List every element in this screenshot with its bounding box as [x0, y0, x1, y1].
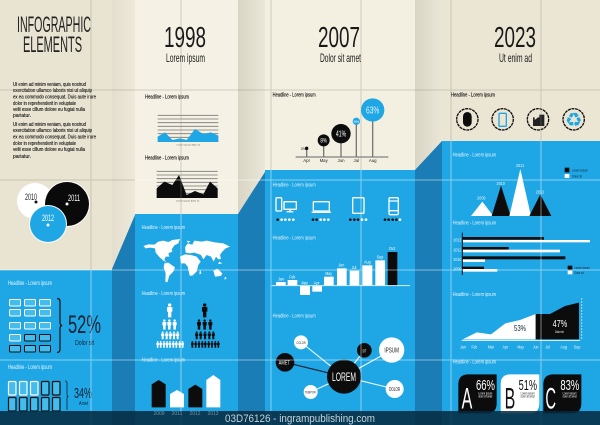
bar chart: horizontal: 2011 [453, 247, 462, 252]
chart: triangles [471, 163, 588, 216]
text block: intro paragraphs: pariatur. [13, 154, 31, 160]
card: A 66%: A [462, 382, 472, 415]
title: ELEMENTS [23, 32, 82, 57]
chart: split area: 47% [553, 319, 568, 330]
caption: Dolor sit [75, 340, 94, 347]
diagram: network bubbles: IPSUM [384, 348, 399, 355]
card: B 51%: Lorem ipsum [521, 391, 535, 395]
bar chart: months: Jul [352, 265, 356, 271]
icon: recycle: ♻ [565, 108, 582, 131]
text block: intro paragraphs [13, 82, 96, 160]
chart: triangles: Dolor sit [572, 174, 582, 178]
bar chart: horizontal: 2010 [453, 257, 462, 262]
heading: Headline - Lorem ipsum [451, 93, 495, 99]
chart: lollipop percentages: Jun [338, 158, 345, 163]
chart: lollipop percentages [273, 93, 388, 163]
panel: 1998 blue column [142, 225, 230, 407]
text block: intro paragraphs: ex ea commodo consequat. Duis aute irure [13, 134, 96, 140]
chart: lollipop percentages: 63% [366, 106, 379, 117]
text block: intro paragraphs: pariatur. [13, 113, 31, 119]
icon: factory [533, 115, 544, 126]
area chart: black: Lorem ipsum dolor sit [176, 199, 200, 202]
heading: Headline - Lorem ipsum [145, 95, 189, 101]
bar chart: horizontal: 2009 [453, 267, 462, 272]
chart: year circles [17, 181, 90, 243]
card: A 66%: 66% [476, 378, 495, 394]
year heading: 2023: Ut enim ad [499, 51, 532, 65]
text block: intro paragraphs: ex ea commodo consequat. Duis aute irure [13, 94, 96, 100]
arrow bar year labels: 2009 [154, 411, 165, 417]
panel: 2023 icons [451, 93, 584, 131]
chart: split area: Jun [533, 344, 539, 350]
bar chart: horizontal: Dolor sit [574, 271, 584, 275]
rating dots [276, 218, 401, 221]
chart: split area: Jul [545, 344, 550, 350]
chart: lollipop percentages: Jul [354, 158, 359, 163]
bar chart: horizontal: Lorem ipsum [574, 266, 590, 270]
chart: arrow bars [152, 375, 220, 407]
bar chart: months [272, 246, 410, 295]
pictogram: black people pyramid [191, 303, 220, 348]
chart: year circles: 2011 [68, 193, 80, 203]
arrow bar year labels [154, 411, 219, 417]
heading: Headline - Lorem ipsum [273, 93, 316, 99]
panel: 1998 area charts [145, 95, 218, 202]
year heading: 2023: 2023 [494, 22, 536, 54]
bar chart: months: Aug [364, 260, 371, 266]
chart: year circles: 2010 [25, 192, 37, 202]
chart: split area: Dolor sit [555, 330, 564, 334]
card: C 83%: 83% [560, 378, 579, 394]
text block: intro paragraphs: Ut enim ad minim veniam, quis nostrud [13, 82, 86, 88]
icons: devices [276, 198, 398, 215]
heading: Headline - Lorem ipsum [8, 281, 52, 287]
card: C 83% [543, 374, 581, 415]
card: A 66%: dolor sit amet [478, 395, 492, 399]
chart: triangles: 2009 [477, 195, 486, 201]
arrow bar year labels: 2011 [172, 411, 183, 417]
text block: intro paragraphs: exercitation ullamco laboris nisi ut aliquip [13, 88, 92, 94]
chart: triangles: 2010 [496, 181, 505, 187]
bar chart: months: Jan [278, 276, 284, 282]
chart: split area: Jan [460, 344, 466, 350]
bar chart: months: Sep [377, 255, 383, 261]
chart: split area: Apr [502, 344, 508, 350]
heading: Headline - Lorem ipsum [142, 358, 185, 364]
bar chart: months: Feb [289, 274, 295, 280]
chart: triangles: Lorem ipsum [572, 168, 588, 172]
chart: split area: May [517, 344, 524, 350]
heading: Headline - Lorem ipsum [273, 313, 316, 319]
arrow bar year labels: 2012 [190, 411, 201, 417]
year heading: 2007: 2007 [318, 22, 360, 54]
chart: triangles: 2011 [516, 163, 524, 169]
area chart: blue: Lorem ipsum dolor sit [177, 144, 201, 147]
card: A 66% [458, 374, 497, 415]
text block: intro paragraphs: velit esse cillum dolore eu fugiat nulla [13, 107, 85, 113]
text block: intro paragraphs: dolor in reprehenderit in voluptate [13, 141, 76, 147]
diagram: network bubbles: DOLOR [389, 387, 400, 393]
heading: Headline - Lorem ipsum [453, 360, 496, 366]
card: B 51%: 51% [519, 378, 537, 394]
panel: phones 34% [8, 365, 92, 411]
watermark footer bar: 03D76126 - ingrampublishing.com [225, 413, 375, 425]
text block: intro paragraphs: exercitation ullamco laboris nisi ut aliquip [13, 128, 92, 134]
heading: Headline - Lorem ipsum [453, 220, 496, 226]
caption: Amet [79, 401, 88, 407]
title [17, 12, 91, 57]
diagram: network bubbles: SIT [362, 348, 366, 354]
year heading: 2007: Dolor sit amet [320, 51, 361, 65]
chart: year circles: 2012 [42, 213, 54, 223]
card: C 83%: C [545, 382, 556, 415]
stat: 52%: 52% [68, 311, 101, 339]
card: C 83%: dolor sit amet [563, 395, 577, 399]
bar chart: months: Oct [389, 246, 396, 252]
bar chart: horizontal: 2012 [453, 238, 462, 243]
card: C 83%: Lorem ipsum [563, 391, 577, 395]
text block: intro paragraphs: velit esse cillum dolore eu fugiat nulla [13, 147, 85, 153]
panel: laptops 52% [8, 281, 101, 352]
icon grid: laptops [10, 300, 50, 352]
chart: lollipop percentages: Apr [303, 158, 311, 163]
panel: device icons and monthly bars [272, 183, 410, 295]
diagram: network bubbles: LOREM [332, 370, 356, 384]
card: B 51%: B [505, 382, 515, 415]
chart: lollipop percentages: 9% [353, 119, 360, 124]
card: B 51%: dolor sit amet [521, 395, 535, 399]
diagram: network bubbles: AMET [279, 360, 291, 366]
text block: intro paragraphs: Ut enim ad minim veniam, quis nostrud [13, 122, 86, 128]
year heading: 1998: 1998 [164, 22, 206, 54]
year heading: 2023 [494, 22, 536, 65]
brace [65, 381, 68, 410]
diagram: network bubbles: TEMPOR [305, 391, 316, 395]
arrow bar year labels: 2013 [208, 411, 219, 417]
stat: 34%: 34% [74, 385, 92, 402]
icon: mouse [463, 112, 472, 127]
chart: lollipop percentages: Aug [369, 158, 377, 163]
diagram: network bubbles: COLOR [296, 341, 306, 345]
chart: split area: 53% [514, 324, 526, 333]
chart: split area: Sep [574, 344, 580, 350]
heading: Headline - Lorem ipsum [142, 291, 185, 297]
heading: Headline - Lorem ipsum [273, 235, 316, 241]
pictogram: white people pyramid [156, 303, 184, 348]
background: stepped blue area [0, 141, 600, 425]
chart: lollipop percentages: 3% [301, 147, 307, 151]
bar chart: months: May [325, 271, 332, 277]
icon: phone [499, 113, 506, 126]
bar chart: months: Apr [314, 280, 320, 286]
chart: lollipop percentages: May [320, 158, 329, 163]
bar chart: months: Jun [338, 263, 344, 269]
text: INFOGRAPHIC [17, 12, 91, 37]
card: A 66%: Lorem ipsum [478, 391, 492, 395]
chart: lollipop percentages: 8% [320, 139, 328, 145]
chart: split area: Mar [488, 344, 494, 350]
chart: split area: Feb [471, 344, 477, 350]
watermark footer bar [0, 411, 600, 425]
heading: Headline - Lorem ipsum [142, 225, 185, 231]
heading: Headline - Lorem ipsum [145, 155, 189, 161]
heading: Headline - Lorem ipsum [8, 365, 52, 371]
panel: area split and letter cards [453, 292, 582, 415]
year heading: 1998: Lorem ipsum [166, 51, 205, 65]
chart: split area: Aug [560, 344, 567, 350]
chart: triangles: 2012 [536, 190, 544, 196]
heading: Headline - Lorem ipsum [273, 183, 316, 189]
heading: Headline - Lorem ipsum [453, 153, 496, 159]
chart: lollipop percentages: 41% [336, 129, 347, 139]
chart: split area [460, 298, 582, 350]
icon grid: phones [8, 382, 60, 411]
bar chart: months: Mar [301, 280, 308, 286]
world map [143, 239, 230, 282]
card: B 51% [501, 374, 539, 415]
brace [57, 298, 62, 352]
text block: intro paragraphs: dolor in reprehenderit in voluptate [13, 101, 76, 107]
diagram: network bubbles [273, 313, 404, 399]
panel: triangle chart and bars [453, 153, 590, 275]
bar chart: horizontal [453, 233, 590, 275]
heading: Headline - Lorem ipsum [453, 292, 496, 298]
year heading: 2007 [318, 22, 361, 65]
year heading: 1998 [164, 22, 206, 65]
